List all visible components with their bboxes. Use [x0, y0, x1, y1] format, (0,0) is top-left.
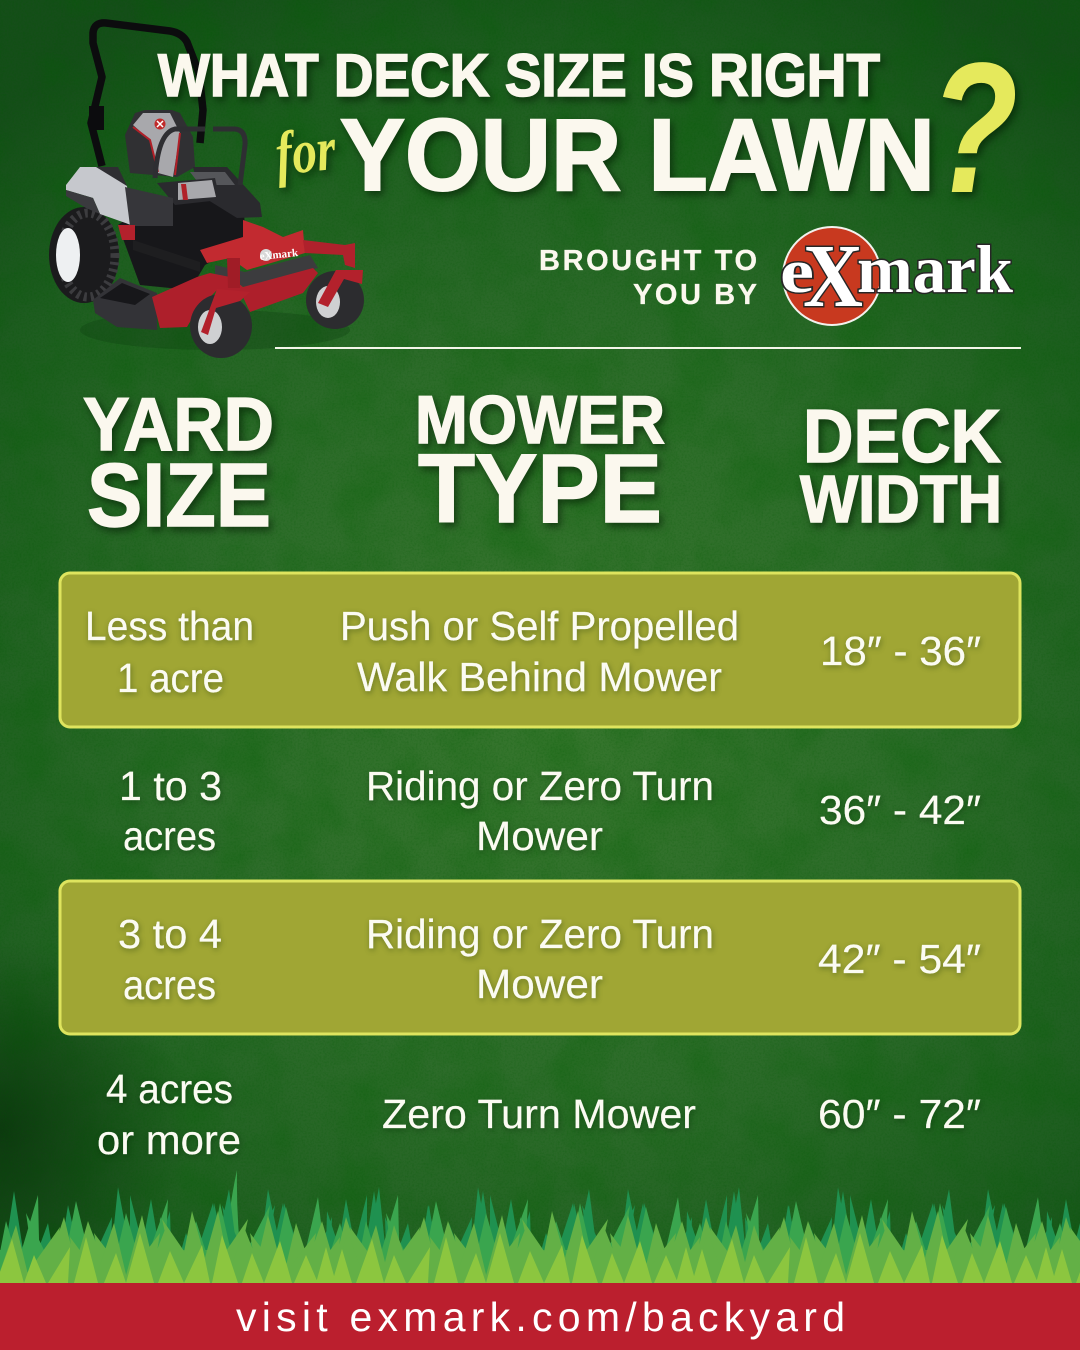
row: less than 1 acre: Walk Behind Mower: [357, 654, 722, 700]
heading: yard size: SIZE: [87, 446, 271, 546]
exmark logo: [780, 227, 1013, 326]
sponsor text: [539, 245, 757, 311]
engine and frame: [118, 198, 246, 290]
highlight row one: [60, 573, 1020, 727]
sponsor text: YOU BY: [633, 279, 757, 311]
illustration: zero turn mower: eXmark: [259, 247, 299, 263]
row: 3 to 4 acres: Mower: [476, 961, 603, 1007]
exmark logo: mark: [857, 231, 1013, 307]
seat cushion: [157, 178, 220, 205]
row: less than 1 acre: 1 acre: [117, 655, 224, 701]
row: 1 to 3 acres: Riding or Zero Turn: [366, 763, 714, 809]
highlight row three: [60, 881, 1020, 1034]
row: 4 acres or more: or more: [97, 1117, 241, 1163]
row: less than 1 acre: 18″ - 36″: [820, 628, 981, 674]
row: 1 to 3 acres: Mower: [476, 813, 603, 859]
row: 1 to 3 acres: acres: [123, 813, 216, 859]
row: 1 to 3 acres: 1 to 3: [119, 763, 222, 809]
title line two: YOUR LAWN: [340, 98, 935, 212]
row: 3 to 4 acres: 42″ - 54″: [818, 936, 981, 982]
roll bar: [91, 23, 203, 166]
heading: deck width: WIDTH: [800, 462, 1002, 537]
heading: deck width: DECK: [803, 394, 1001, 478]
row: less than 1 acre: [85, 603, 981, 701]
question mark: ?: [930, 25, 1018, 232]
row: 3 to 4 acres: [118, 911, 981, 1008]
footer link text: visit exmark.com/backyard: [236, 1294, 845, 1340]
rear wheel: [49, 207, 119, 303]
armrests: [155, 129, 245, 185]
title: [158, 25, 1018, 232]
row: 3 to 4 acres: 3 to 4: [118, 911, 222, 957]
heading: yard size: [83, 382, 274, 546]
column headings: [83, 382, 1002, 546]
seat back: [125, 110, 195, 177]
rear body shell: [66, 167, 131, 225]
exmark logo: e: [780, 238, 814, 306]
row: 4 acres or more: Zero Turn Mower: [382, 1091, 696, 1137]
heading: mower type: TYPE: [418, 434, 662, 543]
heading: deck width: [800, 394, 1002, 537]
row: less than 1 acre: Push or Self Propelled: [340, 603, 739, 649]
row: 3 to 4 acres: acres: [123, 962, 216, 1008]
footer band: [0, 1283, 1080, 1350]
grass: [0, 1170, 1080, 1283]
sponsor text: BROUGHT TO: [539, 245, 757, 277]
right front wheel: [306, 271, 364, 329]
left front wheel: [190, 294, 252, 358]
row: 1 to 3 acres: 36″ - 42″: [819, 787, 981, 833]
exmark logo: X: [803, 227, 863, 326]
row: 4 acres or more: [97, 1066, 981, 1163]
mower deck: [215, 255, 318, 287]
heading: mower type: [415, 382, 665, 543]
row: 4 acres or more: 4 acres: [106, 1066, 233, 1112]
table text: [85, 603, 981, 1163]
illustration: zero turn mower: [49, 23, 364, 358]
foot plate: [93, 278, 157, 330]
row: 3 to 4 acres: Riding or Zero Turn: [366, 911, 714, 957]
heading: mower type: MOWER: [415, 382, 665, 458]
title word: for: for: [272, 115, 340, 189]
heading: yard size: YARD: [83, 382, 274, 466]
row: 4 acres or more: 60″ - 72″: [818, 1091, 981, 1137]
row: less than 1 acre: Less than: [85, 603, 254, 649]
title line one: WHAT DECK SIZE IS RIGHT: [158, 42, 880, 109]
row: 1 to 3 acres: [119, 763, 981, 859]
